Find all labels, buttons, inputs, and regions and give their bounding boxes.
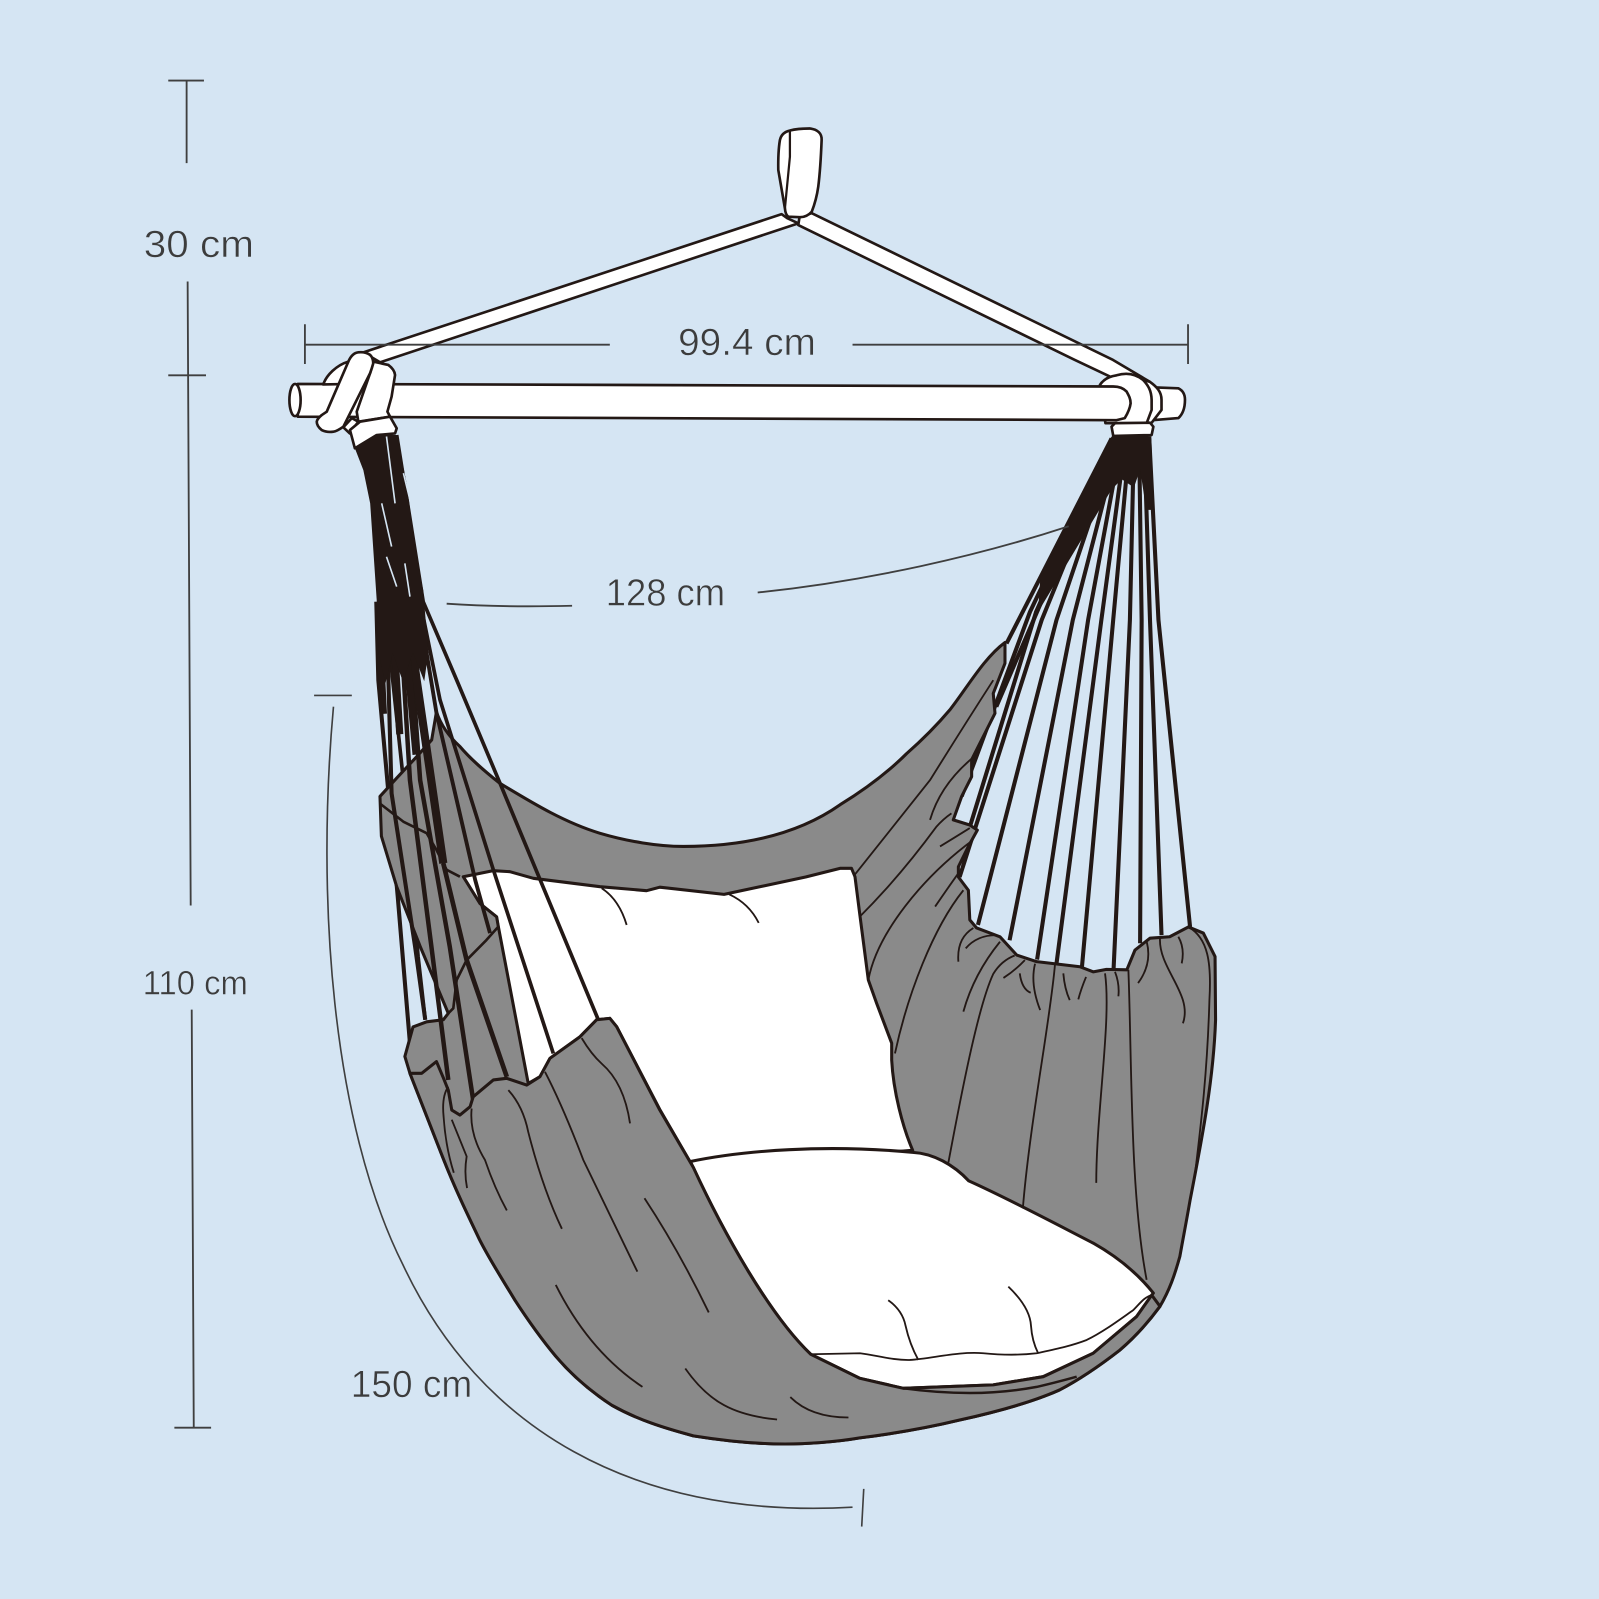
dark rope bundle, left bbox=[355, 435, 428, 683]
dimension: 128 cm bbox=[447, 526, 1069, 614]
right wing fabric folds bbox=[855, 680, 1210, 1280]
dimension: 99.4 cm: 99.4 cm bbox=[678, 321, 816, 363]
right suspension ropes bbox=[960, 436, 1190, 969]
wall hook bbox=[778, 128, 822, 217]
hanging straps bbox=[363, 213, 1150, 382]
right collar bbox=[1112, 423, 1153, 436]
fabric: chair body bbox=[380, 642, 1216, 1444]
front panel of fabric bbox=[410, 1018, 1160, 1444]
left rope running behind the fabric bbox=[376, 602, 410, 1043]
dark rope bundle, right bbox=[1038, 436, 1153, 612]
hook centre line bbox=[785, 131, 790, 208]
flap seam and strip line bbox=[380, 804, 498, 1013]
front panel folds bbox=[443, 1038, 848, 1420]
dimension: 99.4 cm bbox=[305, 321, 1188, 364]
cushion seam and creases bbox=[811, 1287, 1152, 1360]
back pillow bbox=[463, 868, 913, 1168]
left rope running behind the flap bbox=[385, 612, 425, 1020]
under-cushion line bbox=[903, 1377, 1077, 1393]
dimension: 30 cm bbox=[144, 81, 254, 265]
left knot bbox=[317, 352, 397, 448]
dimension: 30 cm: 30 cm bbox=[144, 223, 254, 265]
left suspension ropes bbox=[355, 435, 598, 1100]
dimension: 150 cm bbox=[314, 695, 864, 1527]
seat cushion bbox=[690, 1149, 1153, 1388]
dimension: 110 cm bbox=[143, 281, 248, 1428]
spreader bar with right knot bbox=[289, 374, 1185, 436]
pillow creases bbox=[602, 888, 759, 925]
dimension: 128 cm: 128 cm bbox=[606, 572, 725, 614]
dimension: 150 cm: 150 cm bbox=[351, 1363, 472, 1405]
dimension: 110 cm: 110 cm bbox=[143, 964, 248, 1002]
